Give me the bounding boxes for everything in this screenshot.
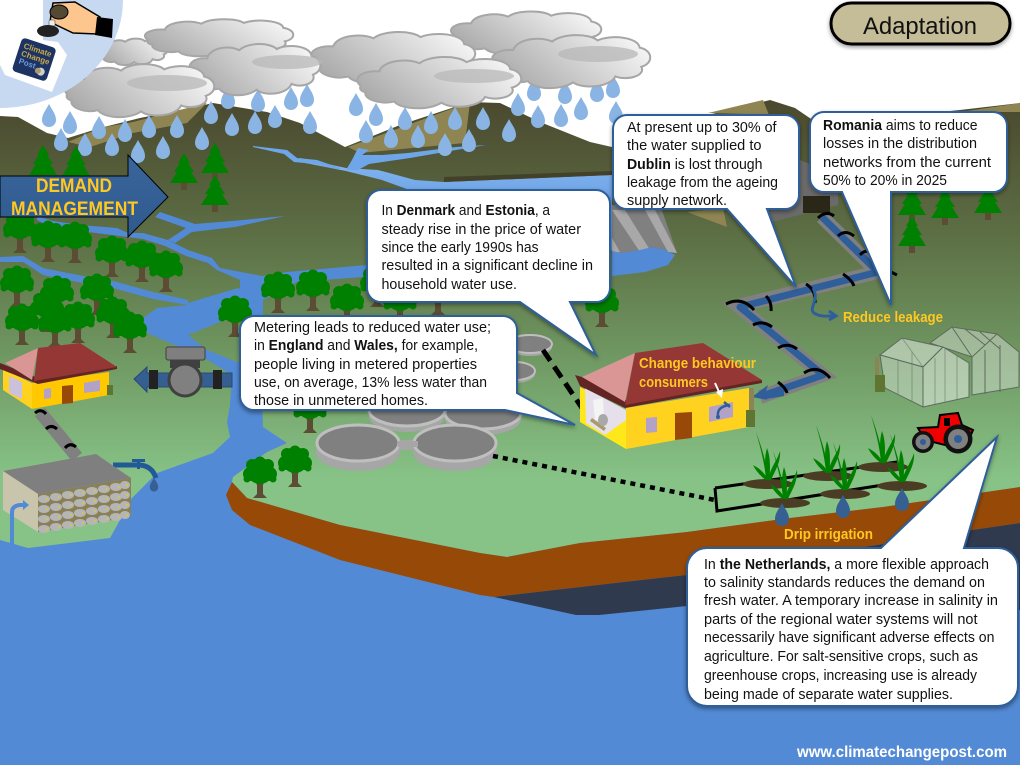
left rivers [0, 212, 367, 306]
callout: the Netherlands: parts of the regional water systems will not [704, 612, 978, 628]
callout: the Netherlands [687, 437, 1018, 706]
island green land [188, 314, 242, 364]
callout: the Netherlands: greenhouse crops, increasing use is already [704, 668, 978, 684]
callout: Romania [810, 112, 1007, 305]
greenhouses [875, 327, 1019, 407]
callout: metering: Metering leads to reduced water use; [254, 320, 491, 336]
callout: Denmark and Estonia [367, 190, 610, 355]
callout: metering: in England and Wales, for example, [254, 338, 478, 354]
callout: Romania: 50% to 20% in 2025 [823, 173, 947, 189]
broadleaf trees [0, 212, 619, 498]
callout: the Netherlands: being made of separate water supplies. [704, 687, 953, 703]
logo badge with hand stamp: Change [20, 49, 51, 67]
dark bank shadow [494, 523, 1020, 615]
small house [0, 343, 117, 409]
left green land [0, 262, 232, 548]
callout: Dublin: At present up to 30% of [627, 120, 777, 136]
callout: Denmark and Estonia: In Denmark and Estonia, a [382, 203, 551, 219]
callout: Denmark and Estonia: household water use. [382, 277, 517, 293]
reservoir lake and upper streams [253, 145, 612, 270]
logo badge with hand stamp [0, 0, 123, 108]
water supply pipeline [726, 213, 897, 397]
rain drops [42, 75, 623, 163]
title pill: Adaptation: Adaptation [863, 13, 977, 40]
callout: the Netherlands: agriculture. For salt-sensitive crops, such as [704, 649, 978, 665]
logo badge with hand stamp: Climate [23, 41, 53, 59]
large house [575, 343, 762, 449]
callout: metering: people living in metered properties [254, 357, 477, 373]
callout: Dublin: leakage from the ageing [627, 175, 778, 191]
pumping building [768, 160, 838, 222]
title pill: Adaptation [831, 3, 1010, 44]
callout: metering: use, on average, 13% less water than [254, 375, 487, 391]
callout: Denmark and Estonia: since the early 1990s has [382, 240, 538, 256]
tan mountain slopes [68, 100, 1020, 227]
water meter [134, 347, 232, 398]
sea and main river water [0, 250, 1020, 765]
callout: metering: those in unmetered homes. [254, 393, 428, 409]
desalination block [3, 454, 158, 546]
leak arrow [812, 288, 836, 320]
drip irrigation tube [715, 462, 897, 511]
callout: Romania: Romania aims to reduce [823, 118, 978, 134]
callout: Dublin [613, 115, 799, 287]
label: drip irrigation: Drip irrigation [784, 527, 873, 543]
callout: Dublin: Dublin is lost through [627, 157, 762, 173]
settling tanks [316, 335, 552, 471]
callout: Romania: losses in the distribution [823, 136, 977, 152]
label: change behaviour consumers [639, 356, 756, 391]
red tractor [912, 413, 973, 454]
callout: the Netherlands: necessarily have significant adverse effects on [704, 630, 994, 646]
callout: Dublin: supply network. [627, 193, 727, 209]
dashed link from tank to house [543, 350, 582, 408]
callout: the Netherlands: In the Netherlands, a more flexible approach [704, 557, 989, 573]
mountains and hillside [0, 100, 1020, 303]
callout: Dublin: the water supplied to [627, 138, 762, 154]
demand management arrow [0, 155, 168, 237]
pine trees [29, 143, 1002, 253]
dam [612, 205, 677, 276]
dotted link from tank to drip irrigation [493, 456, 715, 500]
label: reduce leakage: Reduce leakage [843, 310, 943, 326]
label: change behaviour consumers: consumers [639, 375, 708, 391]
brown soil bank [226, 482, 1020, 597]
website url: www.climatechangepost.com [796, 744, 1007, 761]
callout: Romania: networks from the current [823, 155, 991, 171]
main green land [232, 270, 1020, 557]
demand management arrow: MANAGEMENT [11, 199, 138, 220]
callout: the Netherlands: to salinity standards reduces the demand on [704, 575, 985, 591]
crop plants [743, 415, 927, 526]
callout: Denmark and Estonia: steady rise in the price of water [382, 222, 581, 238]
pipeline arrow into house [752, 385, 784, 400]
grey pipe to small house [35, 411, 77, 457]
white arrow to tap [715, 383, 723, 398]
callout: metering [240, 316, 575, 425]
logo badge with hand stamp: Post [18, 57, 37, 71]
demand management arrow: DEMAND [36, 176, 112, 197]
callout: Denmark and Estonia: resulted in a significant decline in [382, 258, 593, 274]
clouds [64, 12, 650, 117]
label: change behaviour consumers: Change behaviour [639, 356, 756, 372]
callout: the Netherlands: fresh water. A temporary increase in salinity in [704, 593, 998, 609]
